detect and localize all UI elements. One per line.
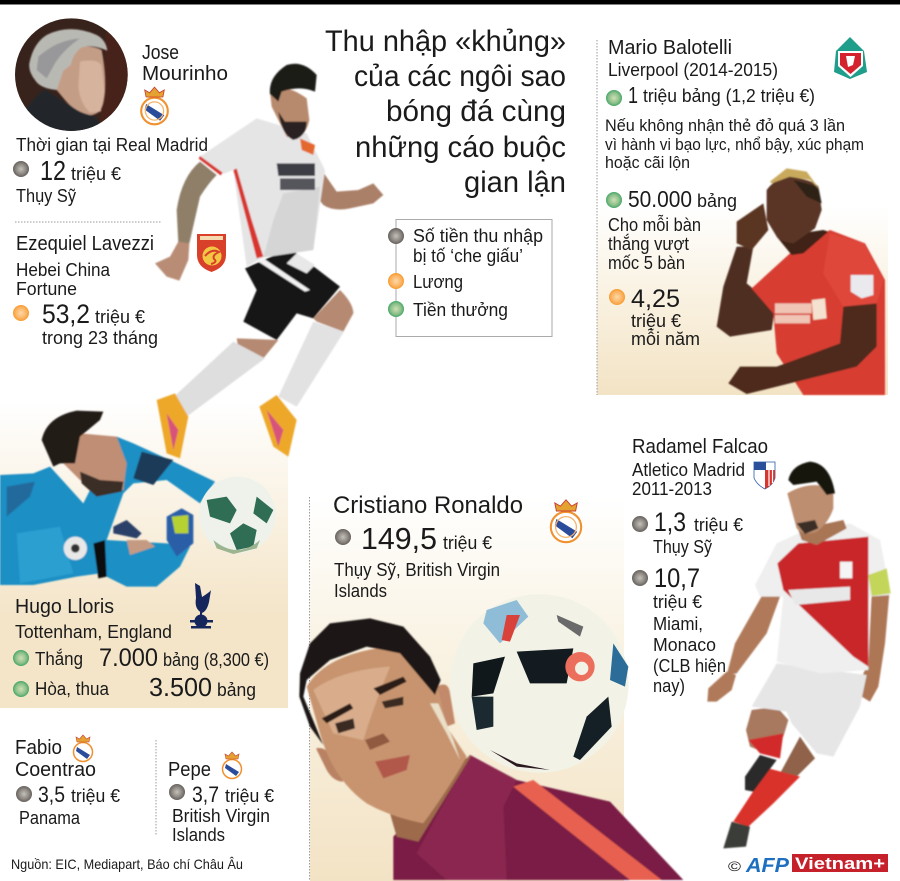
text: Radamel Falcao: triệu € — [694, 515, 743, 535]
text: Ezequiel Lavezzi — [13, 233, 158, 348]
text: Hugo Lloris: Thắng — [35, 648, 83, 669]
legend: Số tiền thu nhập — [413, 226, 543, 246]
footer: AFP and Vietnam+ logos: Vietnam+ — [795, 855, 885, 873]
text: Cristiano Ronaldo: Islands — [334, 581, 387, 601]
text: Hugo Lloris: Tottenham, England — [15, 622, 172, 642]
text: Fabio Coentrao: Fabio — [15, 737, 62, 759]
text: Cristiano Ronaldo — [333, 492, 523, 601]
icon: Real Madrid crest (Ronaldo) — [551, 500, 581, 542]
text: Hugo Lloris: bảng — [217, 680, 256, 700]
diagonal red — [777, 537, 868, 667]
text: Radamel Falcao: Thụy Sỹ — [653, 537, 712, 557]
text: Ezequiel Lavezzi: 53,2 — [42, 299, 90, 329]
ball — [450, 594, 629, 773]
footer: AFP and Vietnam+ logos — [728, 854, 888, 877]
text: Mario Balotelli: thắng vượt — [608, 233, 689, 254]
icon: Tottenham Hotspur crest — [190, 583, 213, 628]
text: Hugo Lloris: Hugo Lloris — [15, 596, 114, 618]
left arm with tattoos — [155, 162, 217, 281]
text: Radamel Falcao: Atletico Madrid — [632, 460, 745, 480]
text: Radamel Falcao: 2011-2013 — [632, 479, 712, 499]
right arm — [317, 170, 383, 209]
text: Pepe: British Virgin — [172, 806, 270, 826]
text: Ezequiel Lavezzi: trong 23 tháng — [42, 328, 158, 348]
neck — [798, 520, 847, 545]
text: Jose Mourinho: Jose — [142, 42, 179, 64]
text: Mario Balotelli: 50.000 — [628, 186, 692, 212]
text: Radamel Falcao: 10,7 — [654, 563, 700, 593]
hair — [299, 618, 441, 745]
shoulder stripe — [513, 780, 662, 880]
text: Mario Balotelli: triệu bảng (1,2 triệu €) — [643, 86, 815, 106]
photo: Radamel Falcao — [707, 462, 891, 848]
top black bar — [0, 0, 900, 4]
text: Mario Balotelli: triệu € — [631, 311, 681, 331]
photo: Hugo Lloris — [0, 411, 276, 587]
text: Jose Mourinho: 12 — [40, 155, 66, 186]
text: Radamel Falcao — [632, 436, 768, 696]
text: Pepe: Islands — [172, 825, 225, 845]
text: Mario Balotelli: Mario Balotelli — [608, 37, 732, 59]
photo: Cristiano Ronaldo with ball — [299, 594, 683, 880]
text: Jose Mourinho — [13, 42, 228, 206]
text: Jose Mourinho: Thụy Sỹ — [16, 186, 76, 206]
text: Radamel Falcao: (CLB hiện — [653, 656, 726, 676]
photo: Jose Mourinho — [13, 17, 130, 133]
legend — [388, 220, 552, 336]
title: của các ngôi sao — [354, 60, 566, 93]
text: Hugo Lloris: 3.500 — [149, 672, 212, 702]
text: Hugo Lloris — [13, 596, 269, 702]
sponsor band and captain band — [788, 587, 850, 605]
text: Mario Balotelli: bảng — [697, 191, 737, 211]
text: Pepe — [168, 759, 274, 845]
blond hair — [770, 168, 820, 190]
text: Fabio Coentrao: triệu € — [71, 786, 120, 806]
text: Mario Balotelli: mỗi năm — [631, 328, 700, 349]
panel: Mario Balotelli background — [597, 205, 888, 395]
text: Ezequiel Lavezzi: Fortune — [16, 279, 77, 299]
text: Jose Mourinho: Thời gian tại Real Madrid — [16, 135, 208, 155]
icon: Real Madrid crest (Mourinho) — [141, 87, 168, 124]
text: Fabio Coentrao: Panama — [19, 808, 81, 828]
title: gian lận — [464, 166, 566, 199]
text: Mario Balotelli: hoặc cãi lộn — [605, 153, 690, 172]
armband — [133, 452, 173, 485]
other glove and arm — [113, 520, 142, 538]
ball — [199, 477, 276, 554]
text: Radamel Falcao: Monaco — [653, 635, 716, 655]
text: Radamel Falcao: 1,3 — [654, 507, 686, 537]
title: bóng đá cùng — [386, 95, 566, 128]
legs — [746, 707, 788, 753]
source note: Nguồn: EIC, Mediapart, Báo chí Châu Âu — [11, 856, 243, 872]
face — [307, 647, 467, 823]
text: Cristiano Ronaldo: Cristiano Ronaldo — [333, 492, 523, 519]
arms — [727, 593, 780, 675]
text: Fabio Coentrao: Coentrao — [15, 759, 96, 781]
shorts — [752, 663, 867, 757]
text: Pepe: 3,7 — [192, 782, 219, 807]
text: Fabio Coentrao: 3,5 — [38, 782, 65, 807]
icon: Real Madrid crest (Pepe) — [222, 752, 242, 778]
text: Mario Balotelli: 1 — [628, 82, 638, 108]
text: Jose Mourinho: Mourinho — [142, 63, 228, 85]
glove — [167, 508, 193, 557]
text: Mario Balotelli: Liverpool (2014-2015) — [608, 60, 778, 80]
shirt — [393, 755, 683, 880]
title: những cáo buộc — [355, 131, 566, 164]
legend: bị tố ‘che giấu’ — [413, 246, 523, 266]
legend: Tiền thưởng — [413, 300, 508, 320]
icon: Hebei China Fortune crest — [197, 234, 226, 272]
text: Radamel Falcao: triệu € — [653, 592, 702, 612]
text: Pepe: triệu € — [225, 786, 274, 806]
left arm — [717, 247, 775, 337]
title: Thu nhập «khủng» — [325, 25, 566, 58]
head — [270, 88, 309, 139]
shirt — [752, 230, 885, 395]
thighs — [313, 290, 353, 332]
legend: Lương — [413, 272, 463, 292]
text: Cristiano Ronaldo: 149,5 — [361, 521, 437, 556]
text: Mario Balotelli: 4,25 — [631, 285, 680, 313]
text: Mario Balotelli: mốc 5 bàn — [608, 253, 685, 273]
boots — [157, 393, 188, 458]
text: Ezequiel Lavezzi: triệu € — [95, 307, 145, 327]
socks — [278, 322, 344, 407]
panel: Cristiano Ronaldo background — [310, 497, 624, 881]
text: Fabio Coentrao — [15, 737, 120, 828]
shirt — [755, 523, 891, 673]
body in blue kit — [0, 437, 215, 587]
text: Ezequiel Lavezzi: Ezequiel Lavezzi — [16, 233, 154, 255]
photo: Ezequiel Lavezzi — [155, 64, 383, 458]
title — [325, 25, 566, 199]
panel: Hugo Lloris background — [0, 400, 288, 708]
head — [787, 485, 833, 534]
icon: Atletico Madrid crest — [754, 462, 775, 489]
footer: AFP and Vietnam+ logos: AFP — [745, 855, 790, 877]
text: Pepe: Pepe — [168, 759, 211, 781]
neck — [777, 230, 828, 255]
text: Mario Balotelli: vì hành vi bạo lực, nhổ bậy, xúc phạm — [605, 135, 864, 154]
text: Mario Balotelli: Cho mỗi bàn — [608, 214, 701, 235]
head — [60, 433, 127, 495]
shorts — [243, 248, 340, 340]
text: Mario Balotelli — [605, 37, 864, 349]
icon: Liverpool crest — [834, 37, 867, 79]
footer: AFP and Vietnam+ logos: © — [728, 858, 742, 874]
text: Hugo Lloris: bảng (8,300 €) — [163, 650, 269, 670]
ears — [437, 684, 455, 727]
text: Ezequiel Lavezzi: Hebei China — [16, 260, 111, 280]
text: Jose Mourinho: triệu € — [71, 164, 121, 184]
text: Radamel Falcao: Radamel Falcao — [632, 436, 768, 458]
photo: Mario Balotelli — [717, 168, 885, 395]
badge — [64, 537, 87, 560]
text: Radamel Falcao: Miami, — [653, 614, 703, 634]
text: Cristiano Ronaldo: triệu € — [443, 533, 492, 553]
head — [767, 177, 822, 243]
hand at temple — [737, 203, 768, 250]
shirt — [200, 118, 325, 267]
text: Hugo Lloris: 7.000 — [99, 644, 158, 672]
text: Hugo Lloris: Hòa, thua — [35, 679, 110, 699]
text: Radamel Falcao: nay) — [653, 676, 685, 696]
neck — [390, 755, 472, 842]
icon: Real Madrid crest (Coentrao) — [74, 735, 92, 762]
text: Mario Balotelli: Nếu không nhận thẻ đỏ quá 3 lần — [605, 116, 845, 135]
right arm — [728, 303, 877, 394]
text: Cristiano Ronaldo: Thụy Sỹ, British Virgin — [334, 560, 500, 580]
